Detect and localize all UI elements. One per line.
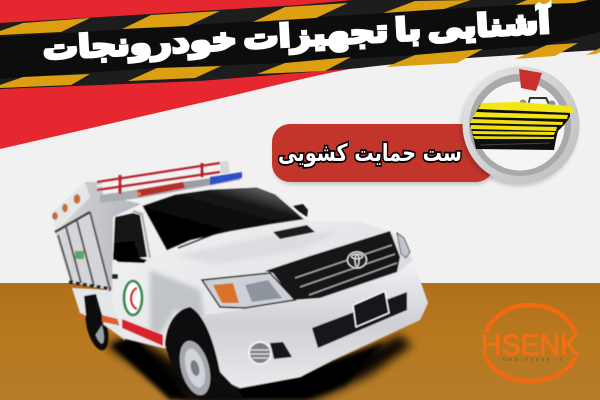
emergency light bar xyxy=(137,172,242,197)
ground shadow xyxy=(105,335,412,400)
pill text: ست حمایت کشویی xyxy=(278,139,462,167)
headlight xyxy=(202,273,295,308)
red swoosh xyxy=(0,0,360,149)
side mirror xyxy=(113,241,147,263)
door handle xyxy=(112,274,118,279)
shutters xyxy=(55,212,111,291)
door pillar xyxy=(133,211,150,258)
icon: circular badge with protective sliding set xyxy=(461,66,580,186)
logo wordmark: HSENK xyxy=(481,329,579,362)
cab and front body xyxy=(112,186,428,388)
logo url: www.hsenk.ir xyxy=(502,357,562,363)
toolbox layers xyxy=(470,102,574,150)
hazard tape banner xyxy=(0,0,600,89)
lower grille xyxy=(312,292,407,348)
body shading xyxy=(150,232,420,372)
red wedge xyxy=(519,69,542,91)
roof rack xyxy=(97,161,240,203)
hood vent xyxy=(273,225,315,239)
fog lamp xyxy=(249,342,292,364)
label pill xyxy=(272,124,494,184)
grille xyxy=(265,231,400,300)
bumper xyxy=(200,260,428,388)
logo: HSENK xyxy=(481,305,579,381)
wipers xyxy=(178,218,290,248)
rear wheel xyxy=(81,301,113,353)
license plate xyxy=(353,291,389,327)
handle xyxy=(520,98,556,108)
side window xyxy=(113,213,147,260)
cargo box xyxy=(52,182,145,340)
windshield xyxy=(143,188,303,250)
right mirror xyxy=(293,204,308,217)
title: آشنایی با تجهیزات خودرونجات xyxy=(42,3,553,67)
right marker light xyxy=(397,233,410,258)
floor xyxy=(0,283,600,400)
yellow stripes xyxy=(0,0,600,88)
icon: red crescent emblem xyxy=(124,281,142,315)
toyota logo xyxy=(348,252,366,268)
front wheel xyxy=(165,307,242,400)
side stripe xyxy=(122,319,163,346)
ambulance truck xyxy=(52,161,428,400)
rear stripe xyxy=(78,312,85,318)
box lights xyxy=(52,194,80,220)
